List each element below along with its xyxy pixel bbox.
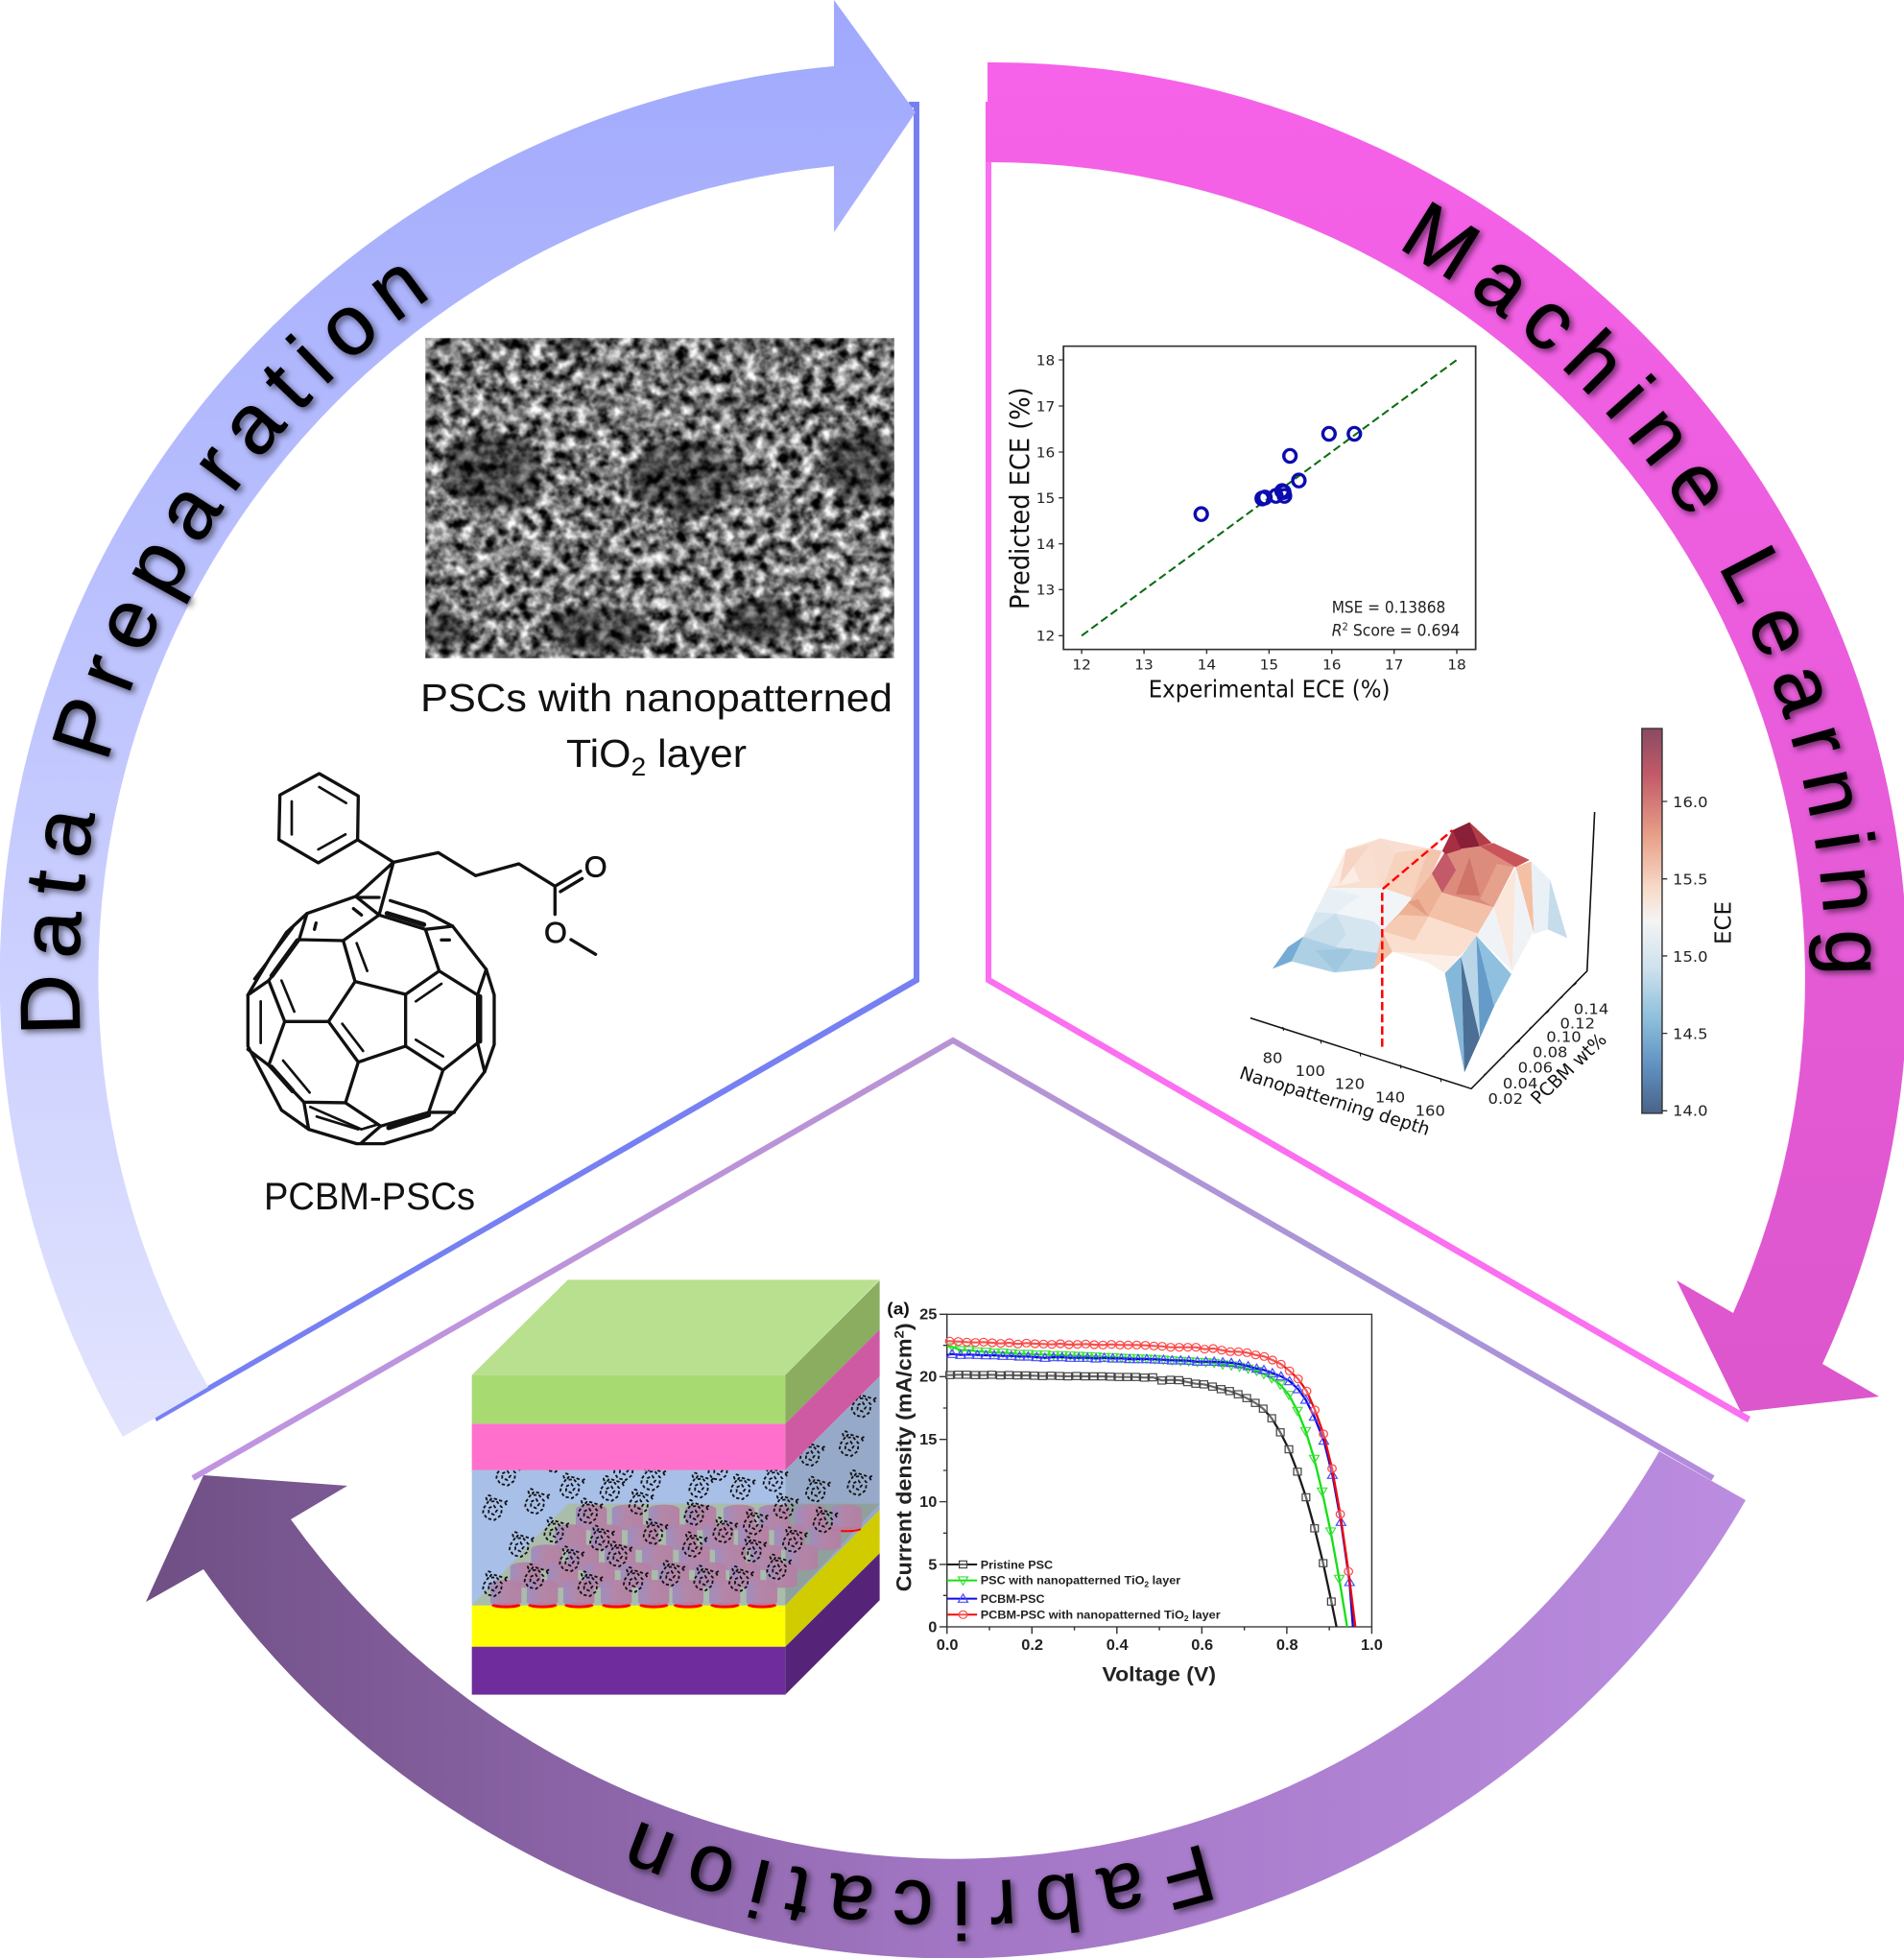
- surface: far slope: [1273, 838, 1442, 972]
- nanopattern pillars: [490, 1505, 862, 1609]
- chart: J-V curves: 20: [919, 1370, 938, 1386]
- heading: Machine Learning: Machine Learning: [1402, 202, 1883, 978]
- chart: predicted vs experimental ECE scatter: 12: [1036, 628, 1055, 644]
- caption: PSCs with nanopatterned TiO2 layer: PSCs with nanopatterned: [420, 676, 892, 720]
- chart: predicted vs experimental ECE scatter: 18: [1447, 657, 1466, 673]
- curve: PCBM-PSC: [947, 1354, 1353, 1627]
- chart: 3D response surface of ECE: 140: [1375, 1088, 1405, 1106]
- chart: predicted vs experimental ECE scatter: 17: [1036, 398, 1055, 415]
- legend: layer: [1149, 1574, 1180, 1588]
- chart: predicted vs experimental ECE scatter: Predicted ECE (%): [1006, 387, 1035, 609]
- chart: 3D response surface of ECE: 100: [1296, 1062, 1325, 1080]
- chart: 3D response surface of ECE: 80: [1263, 1049, 1282, 1066]
- legend: PCBM-PSC: [981, 1592, 1045, 1606]
- chart: 3D response surface of ECE: 0.04: [1503, 1074, 1537, 1092]
- chart: predicted vs experimental ECE scatter: [1006, 346, 1476, 704]
- chart: predicted vs experimental ECE scatter: 18: [1036, 352, 1055, 369]
- chart: 3D response surface of ECE: 14.0: [1673, 1102, 1708, 1119]
- chart: predicted vs experimental ECE scatter: Score = 0.694: [1348, 622, 1460, 640]
- chart: J-V curves: (a): [887, 1299, 910, 1318]
- caption: PSCs with nanopatterned TiO2 layer: 2: [631, 752, 646, 781]
- chart: predicted vs experimental ECE scatter: MSE = 0.13868: [1332, 599, 1445, 617]
- chart: J-V curves: 10: [919, 1494, 938, 1511]
- PCBM molecules dispersed in perovskite: [483, 1393, 877, 1596]
- chart: predicted vs experimental ECE scatter: 14: [1198, 657, 1216, 673]
- legend: PSC with nanopatterned TiO: [981, 1574, 1147, 1588]
- curve: Pristine PSC: [947, 1374, 1337, 1627]
- legend: layer: [1189, 1609, 1221, 1621]
- chart: J-V curves: 1.0: [1361, 1637, 1383, 1654]
- chart: 3D response surface of ECE: 16.0: [1673, 794, 1708, 811]
- legend: 2: [1184, 1614, 1189, 1623]
- curve: PSC with nanopatterned TiO2 layer: [947, 1347, 1347, 1627]
- chart: 3D response surface of ECE: [1237, 728, 1737, 1140]
- legend: Pristine PSC: [981, 1559, 1053, 1571]
- curve: PCBM-PSC with nanopatterned TiO2 layer: [947, 1341, 1355, 1627]
- chart: predicted vs experimental ECE scatter: 2: [1343, 621, 1348, 633]
- caption: PSCs with nanopatterned TiO2 layer: TiO: [566, 731, 629, 776]
- chart: J-V curves: 0.0: [937, 1637, 959, 1654]
- panel divider: machine learning outline: [986, 102, 1750, 1422]
- chart: J-V curves: [887, 1299, 1383, 1685]
- chart: predicted vs experimental ECE scatter: 14: [1036, 536, 1055, 553]
- arrow: machine learning: [986, 62, 1904, 1412]
- chart: 3D response surface of ECE: 160: [1416, 1102, 1445, 1119]
- chart: J-V curves: 0.2: [1021, 1637, 1043, 1654]
- chart: predicted vs experimental ECE scatter: 17: [1385, 657, 1403, 673]
- chart: 3D response surface of ECE: Nanopatterning depth: [1237, 1063, 1433, 1140]
- heading: Fabrication: Fabrication: [628, 1822, 1219, 1948]
- SEM micrograph of nanopatterned TiO2: [419, 336, 895, 658]
- chart: predicted vs experimental ECE scatter: 16: [1322, 657, 1341, 673]
- caption: PCBM-PSCs: PCBM-PSCs: [264, 1176, 475, 1218]
- panel divider: data preparation outline: [155, 102, 919, 1421]
- arrow: data preparation: [0, 0, 916, 1437]
- chart: J-V curves: Current density (mA/cm: [892, 1367, 916, 1591]
- chart: J-V curves: Voltage (V): [1102, 1662, 1216, 1685]
- chart: predicted vs experimental ECE scatter: 12: [1072, 657, 1091, 673]
- panel divider: fabrication outline: [193, 1040, 1713, 1478]
- chart: 3D response surface of ECE: 0.14: [1574, 1000, 1608, 1017]
- surface: peak and near slope: [1373, 823, 1567, 1072]
- arrow: fabrication: [146, 1451, 1746, 1958]
- chart: J-V curves: ): [892, 1323, 916, 1330]
- chart: predicted vs experimental ECE scatter: R: [1332, 622, 1343, 640]
- chart: 3D response surface of ECE: 15.0: [1673, 947, 1708, 966]
- chart: predicted vs experimental ECE scatter: 13: [1036, 582, 1055, 598]
- chart: predicted vs experimental ECE scatter: Experimental ECE (%): [1149, 676, 1390, 704]
- chart: 3D response surface of ECE: 120: [1335, 1075, 1365, 1092]
- device schematic: layered perovskite solar cell: [472, 1279, 880, 1695]
- molecule: PCBM structure: [248, 774, 607, 1144]
- chart: 3D response surface of ECE: 0.02: [1488, 1089, 1523, 1108]
- chart: 3D response surface of ECE: 0.08: [1533, 1043, 1567, 1061]
- chart: predicted vs experimental ECE scatter: 13: [1134, 657, 1154, 673]
- chart: J-V curves: 0.4: [1107, 1637, 1129, 1654]
- molecule: PCBM structure: O: [584, 851, 607, 884]
- chart: J-V curves: 2: [891, 1330, 907, 1338]
- chart: J-V curves: 5: [928, 1558, 938, 1573]
- chart: 3D response surface of ECE: 0.12: [1559, 1015, 1595, 1032]
- chart: J-V curves: 0.6: [1191, 1637, 1213, 1654]
- chart: 3D response surface of ECE: ECE: [1711, 901, 1737, 944]
- chart: J-V curves: 0.8: [1276, 1637, 1298, 1654]
- legend: 2: [1144, 1581, 1150, 1588]
- molecule: PCBM structure: O: [544, 917, 567, 949]
- chart: predicted vs experimental ECE scatter: 15: [1260, 657, 1278, 673]
- legend: PCBM-PSC with nanopatterned TiO: [981, 1609, 1187, 1621]
- chart: predicted vs experimental ECE scatter: 16: [1036, 444, 1055, 461]
- caption: PSCs with nanopatterned TiO2 layer: [420, 676, 892, 781]
- chart: 3D response surface of ECE: 0.10: [1546, 1028, 1582, 1045]
- caption: PSCs with nanopatterned TiO2 layer: layer: [646, 731, 747, 776]
- heading: Data Preparation: Data Preparation: [19, 265, 434, 1037]
- chart: J-V curves: 0: [928, 1620, 938, 1636]
- chart: J-V curves: 15: [919, 1432, 938, 1448]
- chart: J-V curves: 25: [919, 1307, 938, 1324]
- chart: 3D response surface of ECE: 0.06: [1518, 1059, 1553, 1076]
- chart: 3D response surface of ECE: 15.5: [1673, 871, 1708, 889]
- legend: [947, 1559, 1221, 1623]
- chart: predicted vs experimental ECE scatter: 15: [1036, 490, 1055, 507]
- chart: 3D response surface of ECE: PCBM wt%: [1526, 1029, 1611, 1109]
- chart: 3D response surface of ECE: 14.5: [1673, 1025, 1708, 1042]
